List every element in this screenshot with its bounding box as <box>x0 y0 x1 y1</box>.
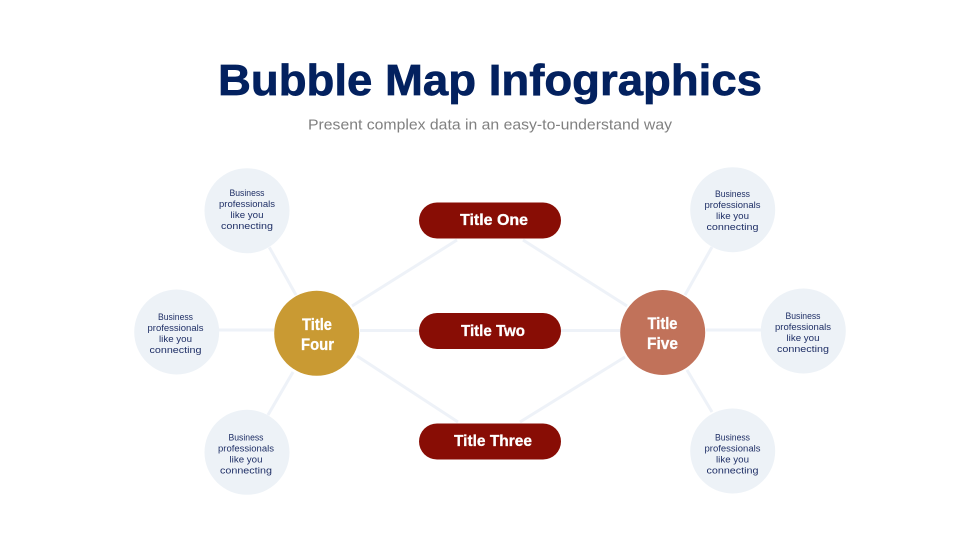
hub: Title Five: Title <box>648 315 678 333</box>
bubble: top left: connecting <box>221 221 273 232</box>
bubble: middle left <box>134 290 219 374</box>
bubble: bottom right <box>690 408 775 494</box>
bubble: bottom left: connecting <box>220 466 272 476</box>
bubble: bottom right: connecting <box>706 466 758 476</box>
bubble: bottom right: Business <box>715 432 750 444</box>
pill: Title One <box>419 202 561 238</box>
hub: Title Five: Five <box>647 335 678 353</box>
hub: Title Four: Four <box>301 336 335 354</box>
bubble: middle right: like you <box>786 333 820 344</box>
bubble: middle left: professionals <box>148 323 204 334</box>
bubble: top right: Business <box>715 189 750 200</box>
hub: Title Four: Title <box>302 316 332 334</box>
pill: Title Two <box>419 313 561 349</box>
bubble: bottom right: like you <box>716 454 749 466</box>
bubble: top left <box>204 168 290 253</box>
bubble: bottom right: professionals <box>704 444 761 454</box>
bubble: middle right <box>761 288 846 374</box>
subtitle: Present complex data in an easy-to-understand way <box>308 116 673 134</box>
hub: Title Five <box>620 290 705 375</box>
pill: Title One: Title One <box>460 212 528 229</box>
bubble: top right: professionals <box>704 200 761 211</box>
bubble: top left: professionals <box>219 199 275 210</box>
pill: Title Three <box>419 424 561 460</box>
bubble: middle left: like you <box>159 334 192 345</box>
bubble: top right: connecting <box>706 222 758 233</box>
bubble: middle right: Business <box>786 311 821 322</box>
bubble: middle right: connecting <box>777 344 829 355</box>
bubble: bottom left: Business <box>228 432 264 444</box>
bubble: middle left: Business <box>158 312 193 323</box>
bubble: top right: like you <box>716 211 749 222</box>
connector lines <box>219 240 762 422</box>
bubble: top left: Business <box>230 188 265 199</box>
bubble: bottom left <box>204 410 290 495</box>
bubble: middle right: professionals <box>775 322 831 333</box>
bubble: middle left: connecting <box>150 345 202 356</box>
title: Bubble Map Infographics <box>218 56 762 105</box>
pill: Title Three: Title Three <box>454 433 532 450</box>
bubble: bottom left: professionals <box>218 444 274 454</box>
bubble: top right <box>690 167 775 252</box>
pill: Title Two: Title Two <box>461 323 525 340</box>
bubble: bottom left: like you <box>230 454 262 466</box>
hub: Title Four <box>274 291 359 376</box>
bubble: top left: like you <box>230 210 264 221</box>
